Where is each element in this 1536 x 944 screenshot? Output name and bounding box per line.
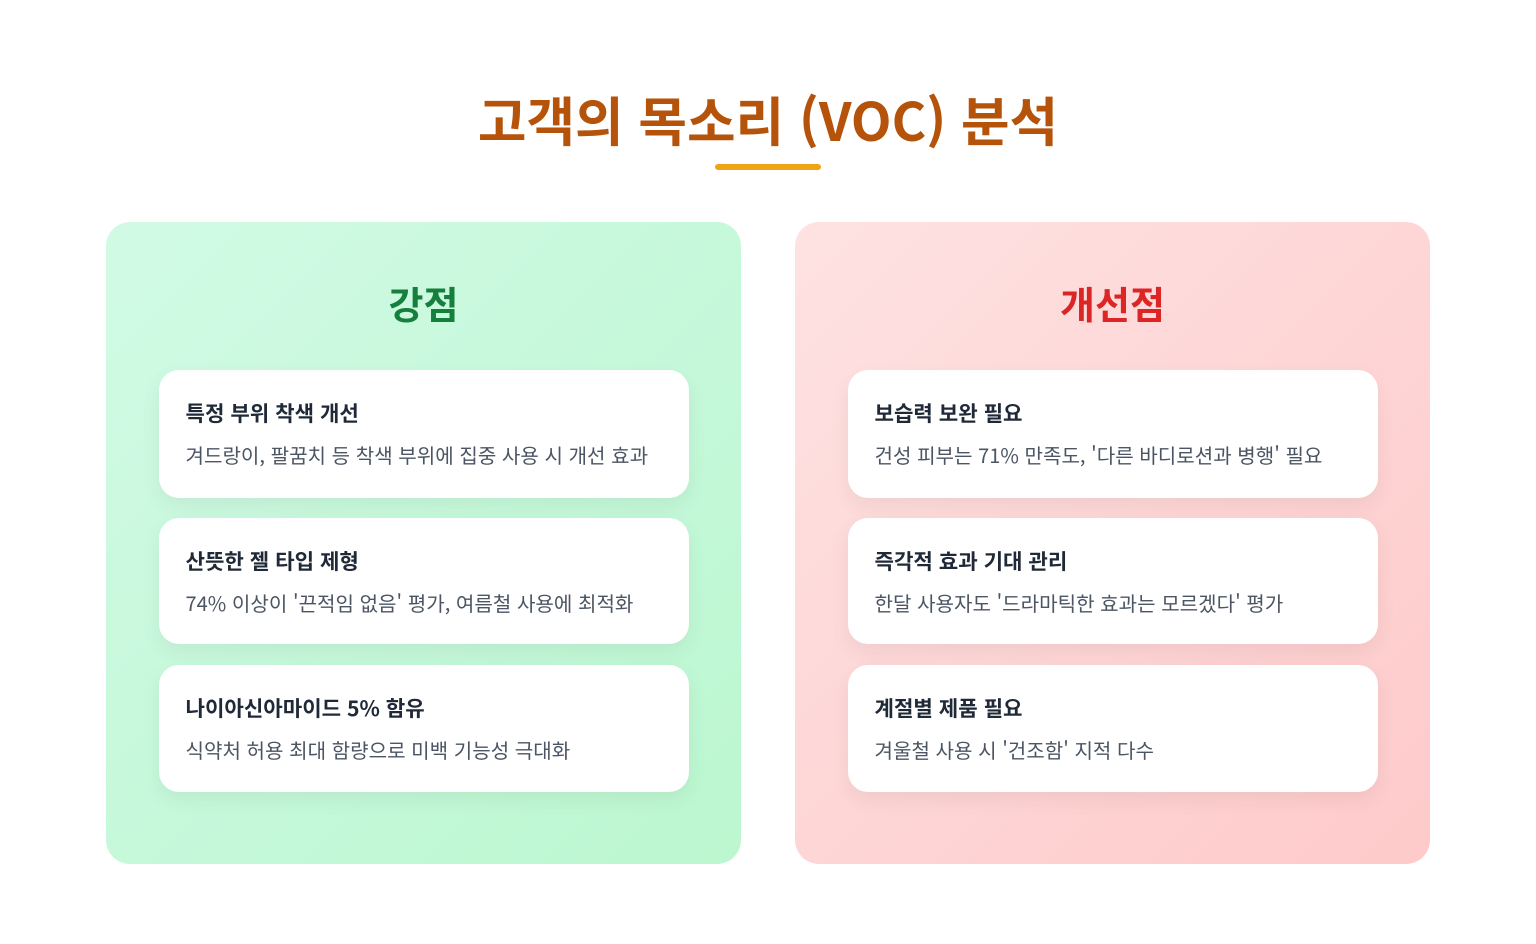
card title: 보습력 보완 필요 <box>874 397 1022 428</box>
card: spot tone improvement <box>159 370 688 498</box>
card title: 산뜻한 젤 타입 제형 <box>186 545 359 576</box>
card: niacinamide content <box>159 665 688 792</box>
card description: 식약처 허용 최대 함량으로 미백 기능성 극대화 <box>186 735 570 764</box>
title underline <box>715 164 821 170</box>
card: moisturizing <box>848 370 1378 498</box>
card description: 한달 사용자도 '드라마틱한 효과는 모르겠다' 평가 <box>874 588 1283 617</box>
heading: improvements: 개선점 <box>1060 275 1165 330</box>
card: expectation management <box>848 518 1378 644</box>
card: seasonal product <box>848 665 1378 792</box>
title: 고객의 목소리 (VOC) 분석 <box>478 81 1058 157</box>
card title: 특정 부위 착색 개선 <box>186 397 359 428</box>
panel: strengths <box>106 222 741 864</box>
card: fresh gel formula <box>159 518 688 644</box>
heading: strengths: 강점 <box>389 275 458 330</box>
card title: 계절별 제품 필요 <box>874 692 1022 723</box>
panel: improvements <box>795 222 1430 864</box>
card title: 나이아신아마이드 5% 함유 <box>186 692 425 723</box>
card description: 겨드랑이, 팔꿈치 등 착색 부위에 집중 사용 시 개선 효과 <box>186 440 648 469</box>
card description: 74% 이상이 '끈적임 없음' 평가, 여름철 사용에 최적화 <box>186 588 633 617</box>
card description: 겨울철 사용 시 '건조함' 지적 다수 <box>874 735 1154 764</box>
card description: 건성 피부는 71% 만족도, '다른 바디로션과 병행' 필요 <box>874 440 1322 469</box>
card title: 즉각적 효과 기대 관리 <box>874 545 1067 576</box>
